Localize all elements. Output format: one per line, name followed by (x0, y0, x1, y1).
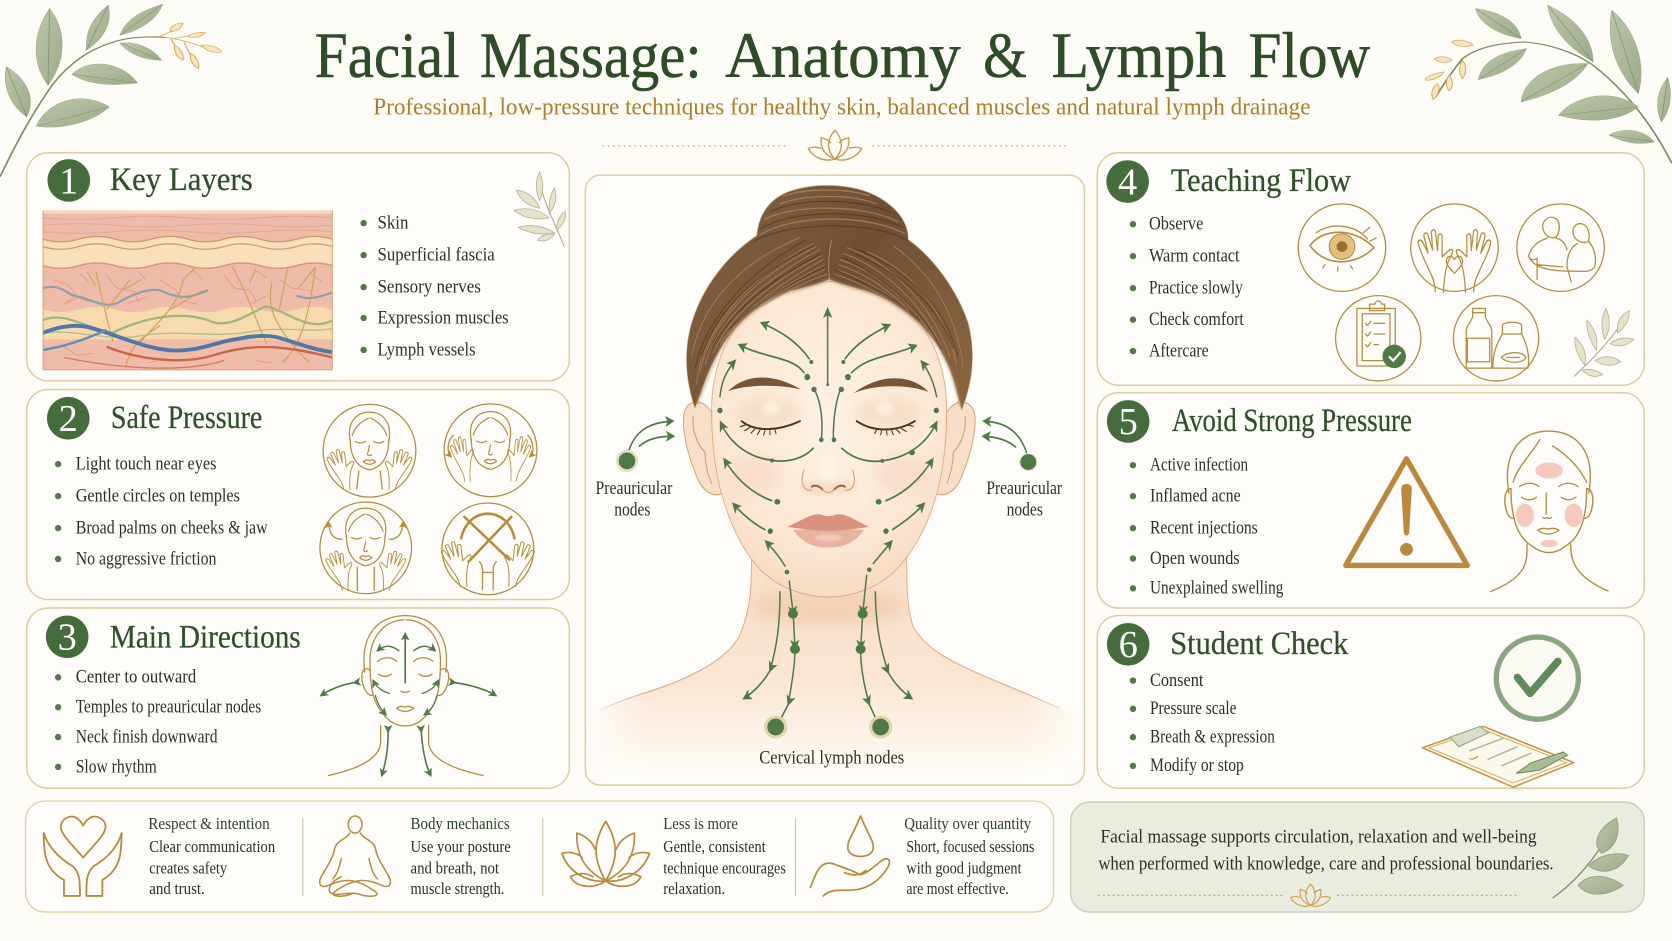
text: respect and intention: and trust. (149, 879, 205, 898)
text: quality over quantity (904, 814, 1034, 898)
heading: teaching flow: Teaching Flow (1171, 163, 1351, 199)
number badge 4 (1106, 160, 1149, 203)
icon: drop over hand (810, 816, 889, 896)
icon: palms on jaw (320, 502, 412, 594)
number badge 3: 3 (58, 617, 77, 659)
panel 4: teaching flow (1097, 153, 1644, 385)
text: body mechanics: Use your posture (411, 837, 511, 856)
title: Flow (1249, 20, 1370, 92)
decorative sprig (1574, 308, 1634, 377)
list: contraindications (1130, 455, 1283, 599)
callout text (1098, 827, 1554, 874)
list: teaching: Practice slowly (1149, 277, 1243, 298)
text: body mechanics: Body mechanics (411, 814, 510, 833)
facial shading (728, 399, 928, 495)
list: teaching (1130, 214, 1245, 361)
icon: temple circles (444, 404, 537, 497)
label: left preauricular nodes (596, 478, 673, 520)
text: respect and intention: Respect & intention (148, 814, 270, 833)
icon: check circle (1496, 637, 1578, 719)
label: left preauricular nodes: Preauricular (596, 478, 673, 499)
text: less is more: Gentle, consistent (663, 837, 766, 856)
list: teaching: Observe (1149, 214, 1203, 235)
illustration: face and neck with lymph routes (600, 184, 1064, 758)
icon: oil bottles (1453, 296, 1539, 381)
subtitle: Professional, low-pressure techniques for healthy skin, balanced muscles and natural lymph drainage (373, 94, 1311, 120)
list: student check: Breath & expression (1150, 726, 1275, 747)
ears (683, 402, 975, 495)
list: directions: Slow rhythm (76, 756, 157, 777)
list: student check: Modify or stop (1150, 755, 1244, 776)
panel 3: main directions (27, 608, 569, 788)
icon: face with sensitive areas (1491, 431, 1608, 592)
sprig (1553, 818, 1628, 898)
list: pressure: Light touch near eyes (76, 453, 216, 474)
list: pressure: No aggressive friction (76, 548, 217, 569)
face (712, 281, 947, 597)
list: teaching: Check comfort (1149, 309, 1245, 330)
lips (787, 514, 869, 547)
nose (802, 470, 854, 493)
text: body mechanics (411, 814, 511, 898)
list: directions: Temples to preauricular nodes (76, 697, 261, 718)
title: Lymph (1051, 20, 1226, 92)
callout text: when performed with knowledge, care and professional boundaries. (1098, 853, 1554, 874)
heading: safe pressure: Safe Pressure (111, 400, 262, 436)
eyebrows (728, 378, 928, 393)
icon: teacher and student (1517, 204, 1604, 291)
number badge 6: 6 (1119, 624, 1138, 666)
list: contraindications: Recent injections (1150, 517, 1258, 538)
title: & (983, 20, 1027, 92)
text: quality over quantity: with good judgment (906, 859, 1022, 878)
list: teaching: Aftercare (1149, 340, 1209, 361)
list: contraindications: Open wounds (1150, 548, 1240, 569)
corner leaves top right (1426, 5, 1672, 164)
list: layers: Expression muscles (377, 307, 509, 328)
callout divider with lotus (1098, 884, 1516, 906)
panel: center face diagram (585, 175, 1084, 785)
label: right preauricular nodes: Preauricular (986, 478, 1063, 499)
panel 6: student check (1097, 616, 1644, 788)
panel 1: key layers (27, 153, 569, 381)
label: left preauricular nodes: nodes (614, 499, 650, 520)
number badge 1 (47, 159, 90, 202)
title: Facial (315, 20, 460, 92)
list: contraindications: Inflamed acne (1150, 485, 1241, 506)
diagram: face with direction arrows (321, 616, 496, 775)
number badge 6 (1107, 623, 1150, 666)
number badge 4: 4 (1118, 161, 1137, 203)
callout: summary (1071, 802, 1644, 912)
list: directions: Neck finish downward (76, 726, 218, 747)
number badge 3 (46, 616, 89, 659)
text: body mechanics: muscle strength. (411, 879, 504, 898)
closed eyes (740, 421, 915, 435)
text: quality over quantity: Quality over quantity (904, 814, 1032, 833)
list: layers: Sensory nerves (377, 276, 481, 297)
heading: avoid strong pressure: Avoid Strong Pressure (1172, 403, 1412, 439)
text: less is more: technique encourages (663, 859, 786, 878)
text: respect and intention: creates safety (149, 859, 228, 878)
preauricular nodes (616, 450, 1037, 472)
list: layers: Skin (377, 212, 409, 233)
icon: lotus (562, 821, 649, 886)
icon: meditating figure (320, 816, 390, 896)
text: body mechanics: and breath, not (411, 859, 499, 878)
title: Massage: (480, 20, 702, 92)
text: less is more (663, 814, 786, 898)
icon: heart in hands (44, 817, 122, 896)
header divider with lotus (602, 130, 1070, 160)
panel 5: avoid strong pressure (1097, 393, 1644, 608)
icon: warm hands with heart (1411, 204, 1498, 293)
text: quality over quantity: are most effective. (906, 879, 1009, 898)
number badge 2: 2 (59, 398, 78, 440)
list: student check (1130, 670, 1275, 776)
list: teaching: Warm contact (1149, 246, 1240, 267)
number badge 5: 5 (1119, 401, 1138, 443)
list: pressure (55, 453, 268, 569)
list: pressure: Gentle circles on temples (76, 485, 240, 506)
text: respect and intention (148, 814, 276, 898)
list: contraindications: Active infection (1150, 455, 1249, 476)
text: respect and intention: Clear communication (149, 837, 276, 856)
hair (686, 185, 973, 410)
title: Anatomy (725, 20, 961, 92)
neck and shoulders (600, 557, 1064, 758)
lymph route arrows (628, 309, 1027, 720)
number badge 2 (47, 397, 90, 440)
heading: key layers: Key Layers (110, 162, 253, 198)
number badge 5 (1107, 400, 1150, 443)
icon: clipboard check (1336, 296, 1421, 381)
heading: main directions: Main Directions (110, 620, 301, 656)
list: layers: Lymph vessels (377, 339, 476, 360)
icon: hands near eyes (323, 404, 416, 497)
label: right preauricular nodes (986, 478, 1063, 520)
list: directions (55, 667, 261, 777)
list: student check: Consent (1150, 670, 1204, 691)
list: layers (360, 212, 509, 360)
icon: warning triangle (1346, 459, 1467, 565)
list: directions: Center to outward (76, 667, 197, 688)
skin cross-section illustration (43, 209, 333, 370)
text: less is more: Less is more (663, 814, 738, 833)
label: cervical lymph nodes: Cervical lymph nodes (759, 748, 904, 769)
list: contraindications: Unexplained swelling (1150, 578, 1283, 599)
heading: student check: Student Check (1170, 626, 1349, 662)
dividers (303, 818, 795, 896)
label: right preauricular nodes: nodes (1007, 499, 1043, 520)
panel 2: safe pressure (27, 389, 569, 600)
decorative sprig (514, 172, 566, 247)
panel: principles strip (26, 801, 1054, 912)
icon: no aggressive friction (441, 503, 534, 595)
cervical nodes (764, 715, 892, 739)
list: layers: Superficial fascia (377, 244, 495, 265)
number badge 1: 1 (59, 160, 78, 202)
node dots (717, 360, 939, 654)
icon: clipboard and pen (1422, 726, 1574, 787)
callout text: Facial massage supports circulation, relaxation and well-being (1100, 827, 1537, 848)
corner leaves top left (0, 4, 222, 177)
list: student check: Pressure scale (1150, 698, 1236, 719)
text: quality over quantity: Short, focused sessions (906, 837, 1034, 856)
list: pressure: Broad palms on cheeks & jaw (76, 517, 268, 538)
title (315, 20, 1370, 92)
text: less is more: relaxation. (663, 879, 725, 898)
icon: eye (1298, 204, 1386, 291)
